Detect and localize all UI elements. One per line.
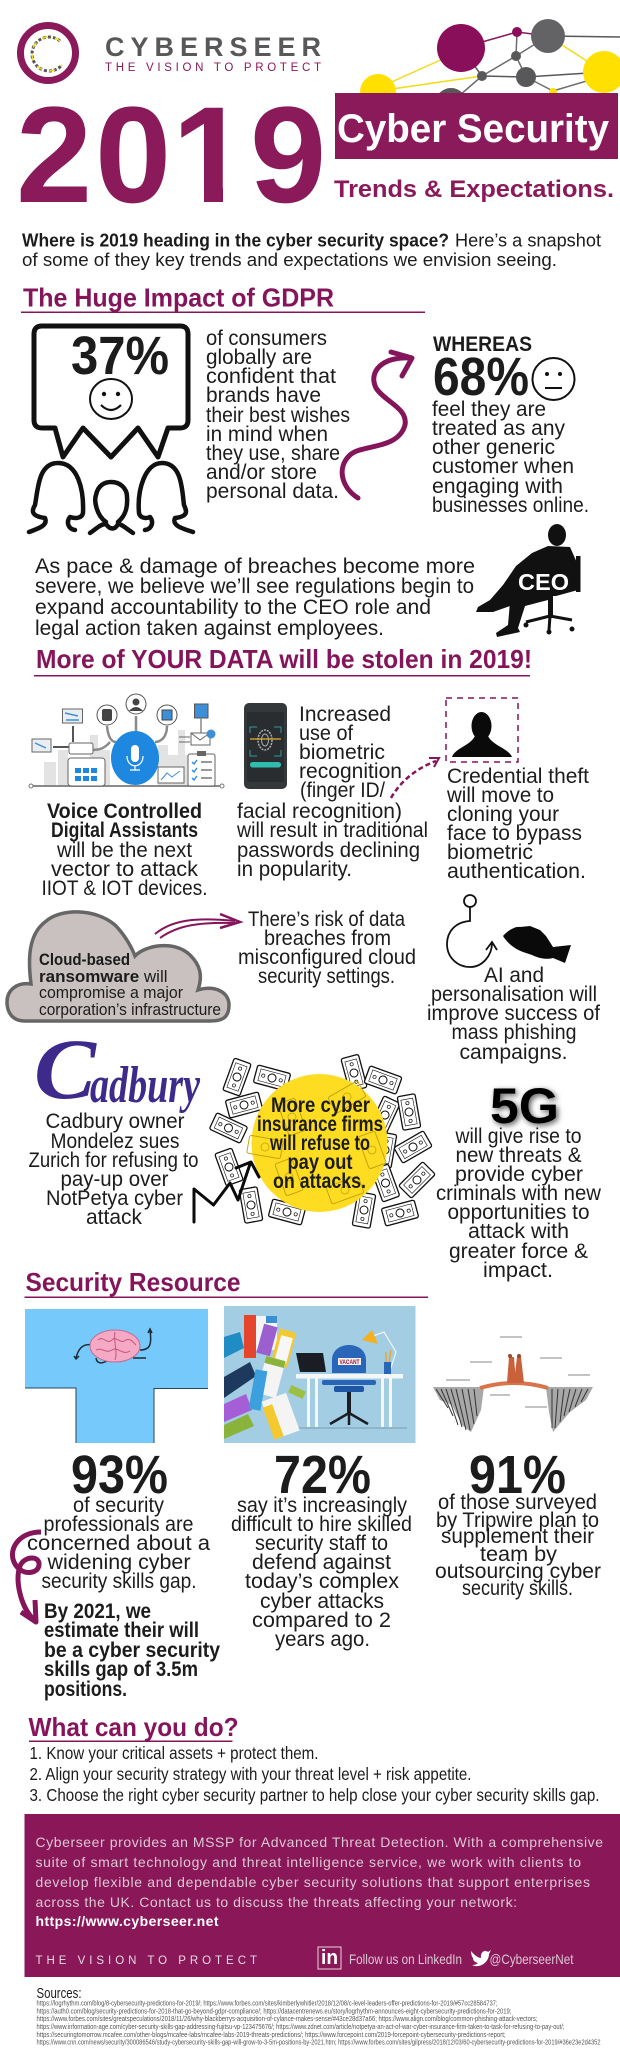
- callout: cyber insurance yellow circle: on attacks.: [273, 1170, 366, 1193]
- text: misconfigured cloud: breaches from: [264, 927, 391, 950]
- text: skills gap: [27, 1494, 210, 1593]
- text: hiring difficulty: compared to 2: [252, 1609, 391, 1632]
- text: 37% of consumers: of consumers: [206, 327, 327, 350]
- text: voice controlled digital assistants: Voice Controlled: [47, 800, 202, 823]
- text: biometric recognition: recognition: [299, 760, 402, 783]
- text: voice controlled digital assistants: Digital Assistants: [51, 819, 198, 842]
- text: AI and personalisation: AI and: [484, 964, 544, 987]
- brand name and tagline: THE VISION TO PROTECT: [105, 62, 321, 74]
- icon: neutral face: [532, 358, 574, 400]
- text: 68% feel treated as generic: [432, 398, 589, 517]
- heading: What can you do?: What can you do?: [28, 1712, 238, 1742]
- text: hiring difficulty: today’s complex: [245, 1570, 399, 1593]
- title year: 2019: 1: [172, 79, 248, 232]
- text: hiring difficulty: difficult to hire skilled: [231, 1513, 412, 1536]
- text: 37% of consumers: globally are: [206, 346, 312, 369]
- callout: cyber insurance yellow circle: pay out: [288, 1151, 353, 1174]
- text: CEO accountability: As pace & damage of breaches become more: [35, 555, 475, 578]
- list: three actions: 1. Know your critical assets + protect them.: [30, 1743, 318, 1763]
- text: biometric recognition: in popularity.: [237, 858, 352, 881]
- text: 5G threats: will give rise to: [455, 1125, 582, 1148]
- text: 37% of consumers: brands have: [206, 384, 321, 407]
- text: biometric recognition: will result in traditional: [236, 819, 428, 842]
- text: CEO accountability: severe, we believe we’ll see regulations begin to: [35, 575, 474, 598]
- text: 37% of consumers: their best wishes: [206, 404, 350, 427]
- text: AI and personalisation: improve success of: [427, 1002, 600, 1025]
- text: company description: suite of smart technology and threat intelligence service, we work with clients to: [36, 1854, 581, 1870]
- text: skills gap: widening cyber: [46, 1551, 191, 1574]
- text: Mondelez sues Zurich: Cadbury owner: [46, 1110, 185, 1133]
- text: misconfigured cloud: There’s risk of data: [248, 908, 405, 931]
- text: company description: [36, 1834, 603, 1929]
- text: 68% feel treated as generic: other generic: [432, 436, 555, 459]
- text: 2021 estimate bold: skills gap of 3.5m: [44, 1658, 198, 1681]
- cloud: cloud-based ransomware: compromise a major: [39, 983, 183, 1002]
- icon: black fish: [503, 926, 571, 963]
- illustration: bridge between cliffs handshake: [433, 1337, 593, 1432]
- callout: cyber insurance yellow circle: insurance firms: [257, 1113, 383, 1136]
- heading: Security Resource: Security Resource: [26, 1267, 240, 1297]
- list: three actions: [30, 1743, 600, 1805]
- text: 68% feel treated as generic: businesses online.: [432, 494, 589, 517]
- text: CEO accountability: expand accountability to the CEO role and: [35, 596, 431, 619]
- arrow: zigzag rising: [194, 1162, 259, 1222]
- text: credential theft: face to bypass: [447, 822, 582, 845]
- text: 68% feel treated as generic: engaging with: [432, 475, 563, 498]
- text: credential theft: [446, 765, 589, 883]
- stat: 72%: 72%: [274, 1445, 371, 1505]
- text: Twitter handle: @CyberseerNet: [490, 1951, 574, 1967]
- logo: Cyberseer emblem: [20, 26, 76, 80]
- title year: 2019: 0: [95, 79, 171, 232]
- title year: 2019: 2: [16, 79, 92, 232]
- cloud: cloud-based ransomware: ransomware will: [39, 967, 168, 986]
- subtitle: Trends & Expectations.: [334, 176, 614, 203]
- text: biometric recognition: passwords declining: [237, 839, 420, 862]
- text: 68% feel treated as generic: treated as any: [432, 417, 565, 440]
- text: 5G threats: provide cyber: [455, 1163, 583, 1186]
- icon: Twitter bird: [471, 1950, 491, 1966]
- text: AI and personalisation: personalisation will: [431, 983, 597, 1006]
- text: credential theft: authentication.: [447, 860, 586, 883]
- text: credential theft: biometric: [447, 841, 533, 864]
- text: CEO accountability: [35, 555, 475, 640]
- sources: https://www.forbes.com/sites/greatspeculations/2018/11/26/why-blackberrys-acquisition-of-cylance-makes-sense/#43ce28d37a66; https://www.align.com/blog/common-phishing-attack-vectors;: [36, 2016, 538, 2023]
- stat: whereas 68%: 68%: [433, 347, 529, 407]
- illustration: brain on blue T panel: [25, 1309, 208, 1443]
- arrow: dashed to credential theft: [391, 758, 439, 798]
- stat: 91%: 91%: [469, 1445, 566, 1505]
- arrow: cloud to misconfiguration note: [155, 914, 240, 938]
- text: 5G threats: criminals with new: [436, 1182, 602, 1205]
- brand name and tagline: CYBERSEER: [105, 32, 321, 62]
- text: 5G threats: [436, 1125, 602, 1282]
- text: 2021 estimate bold: [44, 1600, 220, 1701]
- heading: The Huge Impact of GDPR: The Huge Impact of GDPR: [23, 282, 334, 312]
- text: Tripwire outsourcing: outsourcing cyber: [435, 1560, 601, 1583]
- list: three actions: 2. Align your security strategy with your threat level + risk appetite.: [30, 1764, 472, 1784]
- text: Tripwire outsourcing: supplement their: [441, 1525, 594, 1548]
- text: skills gap: professionals are: [44, 1513, 194, 1536]
- text: voice controlled digital assistants: vector to attack: [51, 858, 199, 881]
- stat: whereas 68%: [433, 333, 574, 407]
- illustration: money notes around circle: [209, 1054, 435, 1228]
- text: 5G threats: opportunities to: [448, 1201, 590, 1224]
- text: hiring difficulty: cyber attacks: [260, 1590, 384, 1613]
- text: misconfigured cloud: security settings.: [258, 965, 395, 988]
- text: biometric recognition: [236, 703, 428, 881]
- text: biometric recognition: use of: [299, 722, 353, 745]
- text: 37% of consumers: [206, 327, 350, 503]
- text: AI and personalisation: campaigns.: [460, 1041, 568, 1064]
- footer tagline: THE VISION TO PROTECT: [36, 1955, 257, 1967]
- text: Mondelez sues Zurich: pay-up over: [60, 1168, 168, 1191]
- text: skills gap: of security: [73, 1494, 164, 1517]
- network graphic: [360, 19, 620, 120]
- text: biometric recognition: Increased: [299, 703, 391, 726]
- text: Tripwire outsourcing: [435, 1491, 601, 1600]
- text: 2021 estimate bold: be a cyber security: [44, 1639, 220, 1662]
- text: hiring difficulty: say it’s increasingly: [237, 1494, 407, 1517]
- text: 5G threats: impact.: [483, 1259, 553, 1282]
- text: company description: develop flexible and dependable cyber security solutions that support enterprises: [36, 1874, 590, 1890]
- text: misconfigured cloud: misconfigured cloud: [238, 946, 416, 969]
- callout: cyber insurance yellow circle: More cyber: [271, 1094, 370, 1117]
- stat: 93%: 93%: [71, 1445, 168, 1505]
- cloud: cloud-based ransomware: [7, 912, 229, 1021]
- icon: seated CEO silhouette: CEO: [518, 569, 569, 595]
- text: credential theft: cloning your: [447, 803, 559, 826]
- text: Tripwire outsourcing: of those surveyed: [438, 1491, 597, 1514]
- text: voice controlled digital assistants: will be the next: [56, 839, 192, 862]
- intro text: of some of they key trends and expectations we envision seeing.: [22, 249, 557, 270]
- text: credential theft: will move to: [446, 784, 554, 807]
- text: credential theft: Credential theft: [447, 765, 589, 788]
- text: 5G threats: attack with: [468, 1220, 569, 1243]
- arrow: looped down to 2021 estimate: [12, 1532, 41, 1622]
- text: hiring difficulty: security staff to: [255, 1532, 388, 1555]
- text: Tripwire outsourcing: by Tripwire plan to: [436, 1509, 599, 1532]
- title year: 2019: 9: [250, 79, 326, 232]
- sources: https://auth0.com/blog/security-predictions-for-2018-that-go-beyond-gdpr-compliance/; https://datacentrenews.eu/story/logrhythm-announces-eight-cybersecurity-predictions-for-2019;: [36, 2008, 512, 2016]
- text: AI and personalisation: mass phishing: [452, 1021, 576, 1044]
- text: Mondelez sues Zurich: attack: [86, 1206, 142, 1229]
- text: biometric recognition: facial recognition): [237, 800, 402, 823]
- text: 5G threats: new threats &: [456, 1144, 582, 1167]
- banner: Cyber Security: [335, 93, 618, 159]
- text: misconfigured cloud: [238, 908, 416, 988]
- text: 68% feel treated as generic: feel they are: [432, 398, 546, 421]
- illustration: vacant job desk with CVs: [224, 1306, 416, 1443]
- sources: Sources:: [36, 1985, 82, 2002]
- text: hiring difficulty: defend against: [252, 1551, 391, 1574]
- text: Tripwire outsourcing: team by: [480, 1543, 558, 1566]
- text: biometric recognition: biometric: [299, 741, 385, 764]
- logo: Cadbury: adbury: [90, 1057, 201, 1114]
- text: voice controlled digital assistants: [42, 800, 208, 900]
- text: 2021 estimate bold: By 2021, we: [44, 1600, 151, 1623]
- text: Mondelez sues Zurich: Mondelez sues: [50, 1130, 180, 1153]
- icon: speech bubble with 37% and smiley: [34, 326, 188, 457]
- cloud: cloud-based ransomware: corporation’s infrastructure: [39, 1000, 221, 1019]
- sources: https://securingtomorrow.mcafee.com/other-blogs/mcafee-labs/mcafee-labs-2019-threats-predictions/; https://www.forcepoint.com/2019-forcepoint-cybersecurity-predictions-report;: [36, 2032, 506, 2039]
- text: 5G threats: greater force &: [449, 1240, 588, 1263]
- text: skills gap: security skills gap.: [42, 1570, 196, 1593]
- stat: 5G with shadow: 5G: [490, 1078, 559, 1134]
- text: Mondelez sues Zurich: NotPetya cyber: [46, 1187, 183, 1210]
- text: follow on LinkedIn: Follow us on LinkedIn: [349, 1951, 462, 1967]
- text: 68% feel treated as generic: customer when: [432, 455, 574, 478]
- text: 37% of consumers: confident that: [206, 365, 336, 388]
- icon: three people outlines: [29, 463, 193, 533]
- icon: fish hook: [447, 895, 497, 967]
- icon: face silhouette in dashed frame: [446, 698, 518, 762]
- icon: LinkedIn: in: [321, 1947, 338, 1969]
- text: Mondelez sues Zurich: Zurich for refusing to: [28, 1149, 198, 1172]
- cloud: cloud-based ransomware: Cloud-based: [39, 950, 130, 969]
- stat: whereas 68%: WHEREAS: [433, 333, 532, 356]
- heading: More of YOUR DATA: More of YOUR DATA will be stolen in 2019!: [36, 644, 532, 674]
- logo: Cadbury: [34, 1021, 201, 1117]
- text: 2021 estimate bold: estimate their will: [44, 1619, 199, 1642]
- callout: cyber insurance yellow circle: [247, 1074, 388, 1212]
- text: 2021 estimate bold: positions.: [44, 1678, 127, 1701]
- panel: about Cyberseer footer: [24, 1814, 620, 1977]
- arrow: squiggle from 37% to 68%: [342, 352, 412, 498]
- text: CEO accountability: legal action taken against employees.: [35, 617, 384, 640]
- text: biometric recognition: (finger ID/: [300, 779, 385, 802]
- text: company description: Cyberseer provides an MSSP for Advanced Threat Detection. With a comprehensive: [36, 1834, 603, 1850]
- text: AI and personalisation: [427, 964, 600, 1064]
- callout: cyber insurance yellow circle: will refuse to: [269, 1132, 370, 1155]
- icon: smartphone fingerprint scan: [244, 703, 287, 789]
- text: Mondelez sues Zurich: [28, 1110, 198, 1229]
- text: skills gap: concerned about a: [27, 1532, 210, 1555]
- intro text: Here’s a snapshot: [455, 230, 601, 250]
- intro text: Where is 2019 heading in the cyber security space?: [22, 230, 449, 250]
- icon: speech bubble with 37% and smiley: 37%: [71, 326, 169, 386]
- text: 37% of consumers: in mind when: [206, 423, 328, 446]
- illustration: voice controlled digital assistant: [29, 694, 224, 788]
- logo: Cadbury: C: [34, 1021, 98, 1117]
- text: Tripwire outsourcing: security skills.: [462, 1577, 573, 1600]
- sources: https://logrhythm.com/blog/8-cybersecurity-predictions-for-2019/; https://www.forbes.com/sites/kimberlywhitler/2018/12/08/c-level-leaders-offer-predictions-for-2019/#57cc28584737;: [36, 2000, 498, 2008]
- text: 37% of consumers: personal data.: [206, 480, 339, 503]
- text: company description: https://www.cyberseer.net: [36, 1913, 219, 1929]
- text: 37% of consumers: they use, share: [206, 442, 340, 465]
- banner: Cyber Security: Cyber Security: [337, 107, 610, 151]
- text: hiring difficulty: years ago.: [275, 1628, 370, 1651]
- intro text: [22, 230, 601, 270]
- title year: 2019: [16, 79, 326, 232]
- text: voice controlled digital assistants: IIOT & IOT devices.: [42, 877, 208, 900]
- illustration: vacant job desk with CVs: VACANT: [340, 1360, 360, 1366]
- text: 37% of consumers: and/or store: [206, 461, 317, 484]
- sources: [36, 1985, 601, 2046]
- text: company description: across the UK. Contact us to discuss the threats affecting your network:: [36, 1894, 517, 1910]
- icon: seated CEO silhouette: [476, 524, 580, 637]
- text: hiring difficulty: [231, 1494, 412, 1651]
